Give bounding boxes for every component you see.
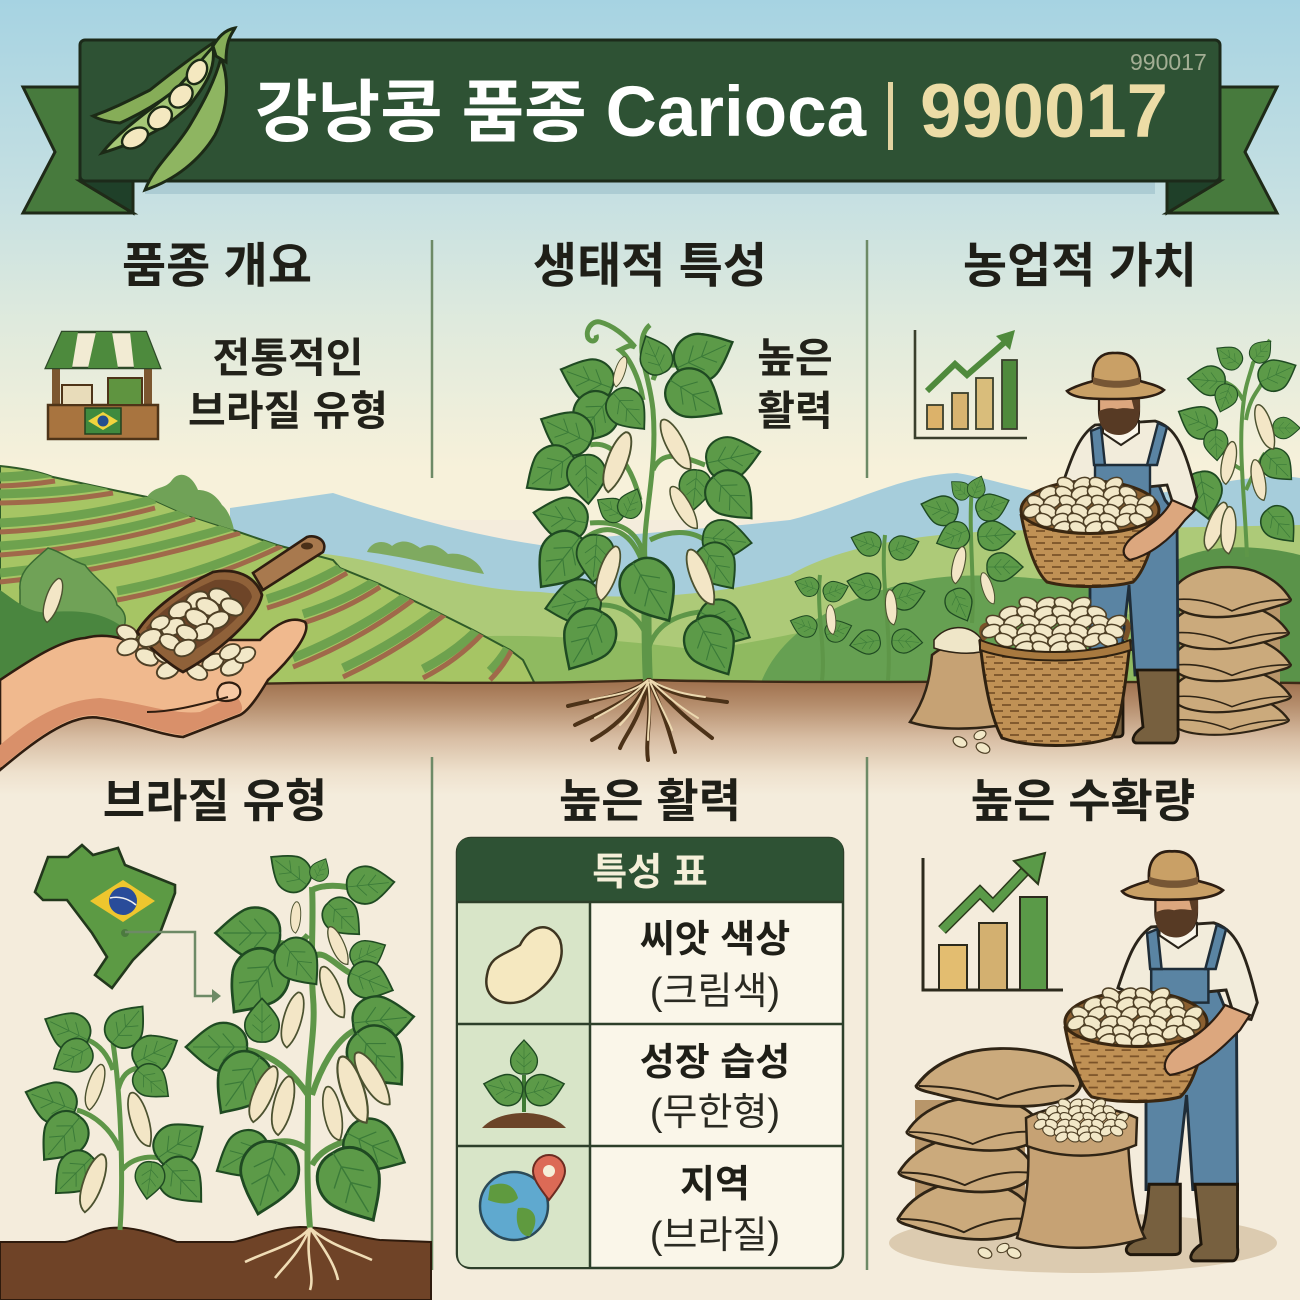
icon: globe with pin [480, 1155, 565, 1240]
label: region: 지역 [680, 1164, 750, 1206]
panel: variety overview [0, 240, 388, 770]
panel: agricultural value [787, 240, 1300, 755]
text: Brazilian type: 브라질 유형 [188, 388, 388, 434]
text: high: 높은 [757, 335, 833, 381]
roots [568, 680, 727, 760]
heading: high vigor: 높은 활력 [559, 775, 741, 827]
scoop beans [136, 585, 246, 660]
panel: high vigor and trait table [457, 775, 843, 1268]
illustration: farmer [1118, 851, 1257, 1261]
pod on tree [39, 576, 66, 624]
value: Brazil: (브라질) [650, 1215, 780, 1257]
panel: ecological traits [514, 240, 833, 760]
thumb [217, 683, 240, 701]
panel: high yield [889, 775, 1277, 1273]
soil patch [0, 1227, 431, 1300]
illustration: bean plant with roots [514, 320, 768, 760]
heading: Brazilian type: 브라질 유형 [103, 775, 327, 827]
far tree line [367, 542, 484, 574]
panel: Brazilian type [0, 775, 431, 1300]
tree cluster at left [20, 548, 125, 640]
title banner [23, 28, 1277, 213]
bottom cream background [0, 680, 1300, 1300]
scoop handle hole [301, 542, 313, 550]
table left column [458, 902, 590, 1267]
farmer forearm and hand [1165, 1005, 1250, 1075]
landscape: hills and fields [0, 466, 1300, 690]
table header [457, 838, 843, 902]
left ribbon tail [23, 87, 133, 213]
illustration: right sack stack [1169, 567, 1291, 735]
illustration: front basket of beans [979, 595, 1131, 746]
sky background [0, 0, 1300, 520]
hand shadow [0, 695, 242, 768]
pods [591, 355, 720, 609]
scoop bowl inner [146, 580, 252, 655]
left ribbon fold [80, 181, 133, 213]
heading: ecological traits: 생태적 특성 [533, 240, 767, 293]
title divider [888, 82, 893, 150]
roots [245, 1228, 372, 1290]
illustration: left burlap sack [910, 628, 996, 729]
farmer forearm and hand [1124, 500, 1195, 560]
loose beans [976, 1242, 1023, 1260]
table body [457, 838, 843, 1268]
trait table [457, 838, 843, 1268]
icon: bean pods [93, 28, 235, 190]
illustration: sack stack [898, 1049, 1081, 1239]
heading: variety overview: 품종 개요 [122, 240, 312, 293]
loose beans [951, 729, 992, 755]
illustration: large bean plant with roots [186, 843, 422, 1290]
banner body [80, 40, 1220, 181]
tree clump behind field [147, 475, 234, 530]
hand [0, 620, 306, 770]
illustration: hand holding scoop of beans [0, 536, 324, 770]
illustration: held basket [1065, 985, 1207, 1102]
label: seed colour: 씨앗 색상 [640, 919, 790, 961]
illustration: held basket [1021, 475, 1159, 586]
dark bush at left [0, 590, 124, 684]
title number: 990017 [920, 69, 1168, 154]
icon: rising yield chart [923, 853, 1063, 990]
icon: market stall [46, 332, 160, 439]
icon: seedling [480, 1040, 568, 1128]
table header label: 특성 표 [592, 852, 708, 894]
banner shadow [145, 181, 1155, 194]
field terraces [0, 472, 513, 680]
scoop handle [253, 536, 324, 590]
dark tree bands on right [760, 576, 1090, 685]
text: traditional: 전통적인 [213, 335, 363, 381]
value: cream: (크림색) [650, 971, 780, 1013]
map: Brazil with flag [35, 845, 221, 1003]
icon: cream bean [486, 927, 562, 1003]
value: indeterminate: (무한형) [650, 1092, 780, 1134]
leaves [514, 320, 768, 687]
illustration: farmer [1063, 353, 1197, 743]
illustration: small bean plants [787, 473, 1023, 680]
heading: high yield: 높은 수확량 [971, 775, 1195, 827]
section dividers [432, 240, 867, 1270]
light rolling hill [300, 525, 1300, 690]
ground shadow [889, 1213, 1277, 1273]
illustration: small bean plant [19, 994, 216, 1230]
title text: 강낭콩 품종 Carioca [255, 73, 867, 152]
lower rolling hill [420, 610, 1300, 690]
scoop bowl [137, 571, 262, 672]
text: vigor: 활력 [757, 388, 833, 434]
lower beans [114, 622, 258, 683]
palm crease [147, 697, 228, 712]
illustration: right background bean plant [1171, 334, 1300, 557]
small code: 990017 [1130, 49, 1207, 75]
dark tree bands far right [1160, 547, 1300, 685]
icon: rising bar chart [915, 330, 1027, 438]
right ribbon fold [1167, 181, 1220, 213]
heading: agricultural value: 농업적 가치 [963, 240, 1197, 293]
soil band [0, 680, 1300, 795]
thick lower stem [646, 590, 648, 682]
label: growth habit: 성장 습성 [640, 1042, 790, 1084]
plant stems and tendril [583, 322, 705, 680]
terraced field [0, 466, 535, 684]
right ribbon tail [1167, 87, 1277, 213]
illustration: open sack of beans [1017, 1097, 1145, 1248]
distant blue mountains [230, 473, 1300, 660]
